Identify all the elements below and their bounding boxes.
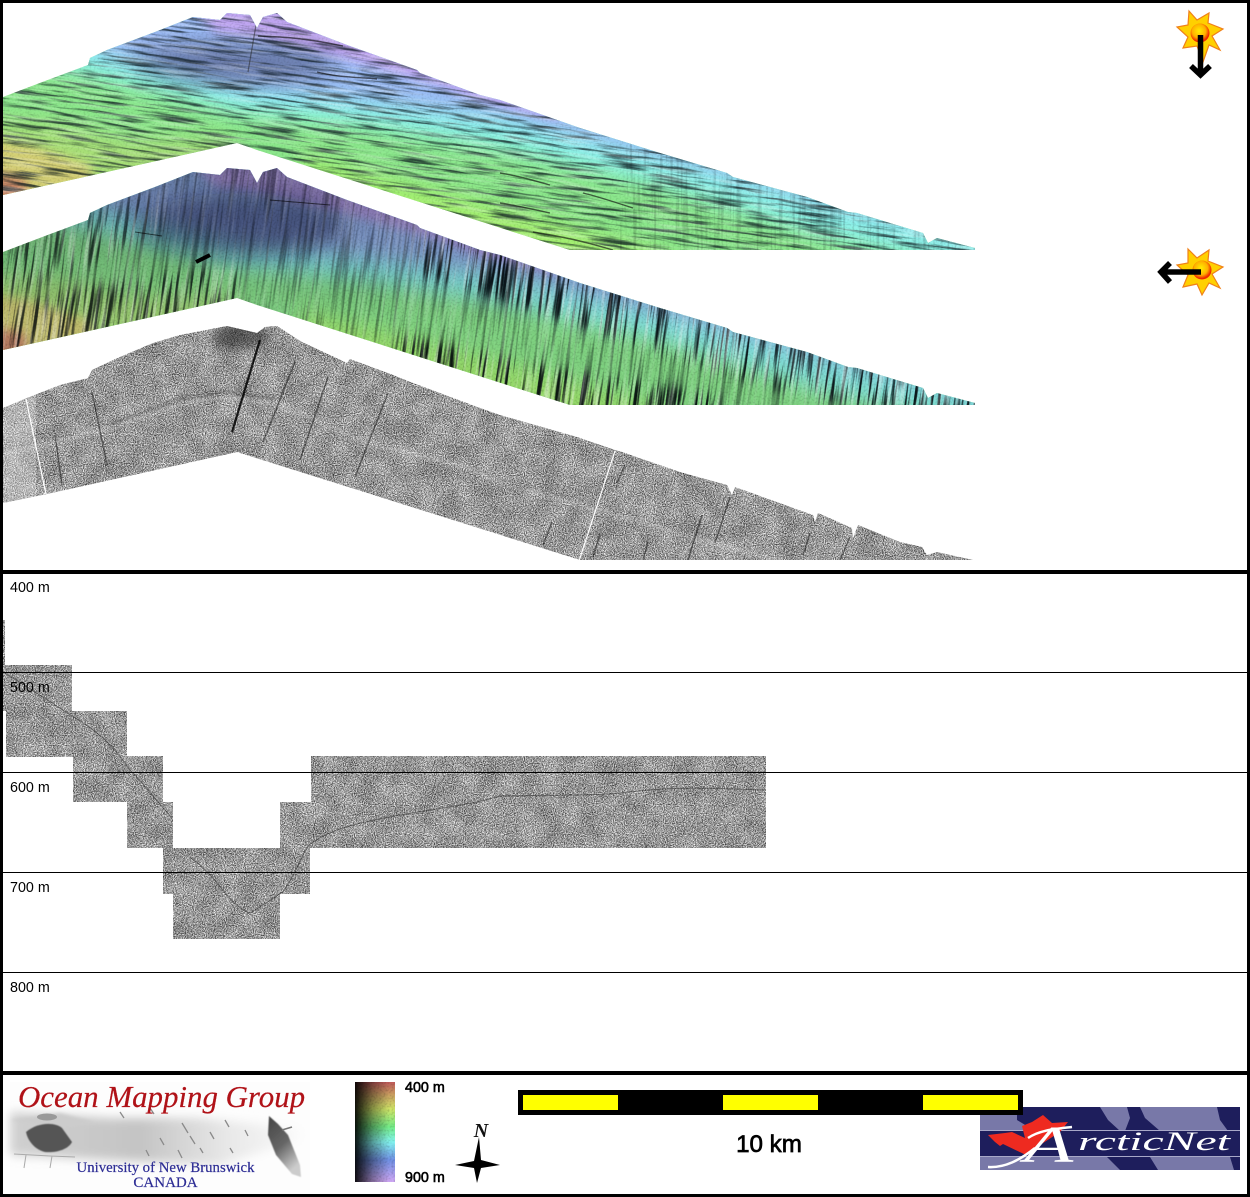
legend: depth colour bar: 400 m bbox=[405, 1080, 445, 1096]
logo: Ocean Mapping Group: University of New Brunswick bbox=[77, 1160, 255, 1176]
logo: Ocean Mapping Group: Ocean Mapping Group bbox=[18, 1079, 305, 1114]
panel: depth profile bbox=[0, 580, 1247, 996]
grid lines and depth labels: 400 m bbox=[10, 580, 50, 596]
scale bar bbox=[518, 1090, 1023, 1158]
logo: Ocean Mapping Group bbox=[10, 1079, 310, 1191]
logo: ArcticNet: A bbox=[1019, 1116, 1074, 1174]
grid lines and depth labels: 700 m bbox=[10, 880, 50, 896]
logo: Ocean Mapping Group: CANADA bbox=[133, 1175, 198, 1191]
icon: sun east with left arrow bbox=[1161, 249, 1223, 295]
map: bathymetry lit from north bbox=[3, 13, 975, 250]
chart: sub-bottom profile blocks bbox=[0, 615, 770, 943]
logo: ArcticNet bbox=[980, 1107, 1240, 1174]
grid lines and depth labels: 800 m bbox=[10, 980, 50, 996]
legend: depth colour bar: 900 m bbox=[405, 1170, 445, 1186]
grid lines and depth labels: 600 m bbox=[10, 780, 50, 796]
icon: sun north with down arrow bbox=[1177, 11, 1223, 75]
map: backscatter mosaic bbox=[0, 320, 980, 565]
grid lines and depth labels bbox=[3, 580, 1247, 996]
logo: ArcticNet: rcticNet bbox=[1078, 1127, 1231, 1156]
map: bathymetry lit from east bbox=[3, 168, 975, 405]
icon: north arrow: N bbox=[473, 1120, 490, 1142]
legend: depth colour bar bbox=[355, 1080, 445, 1186]
grid lines and depth labels: 500 m bbox=[10, 680, 50, 696]
scale bar: 10 km bbox=[736, 1131, 802, 1158]
icon: north arrow bbox=[455, 1120, 500, 1183]
panel: shaded seafloor maps bbox=[3, 13, 975, 560]
